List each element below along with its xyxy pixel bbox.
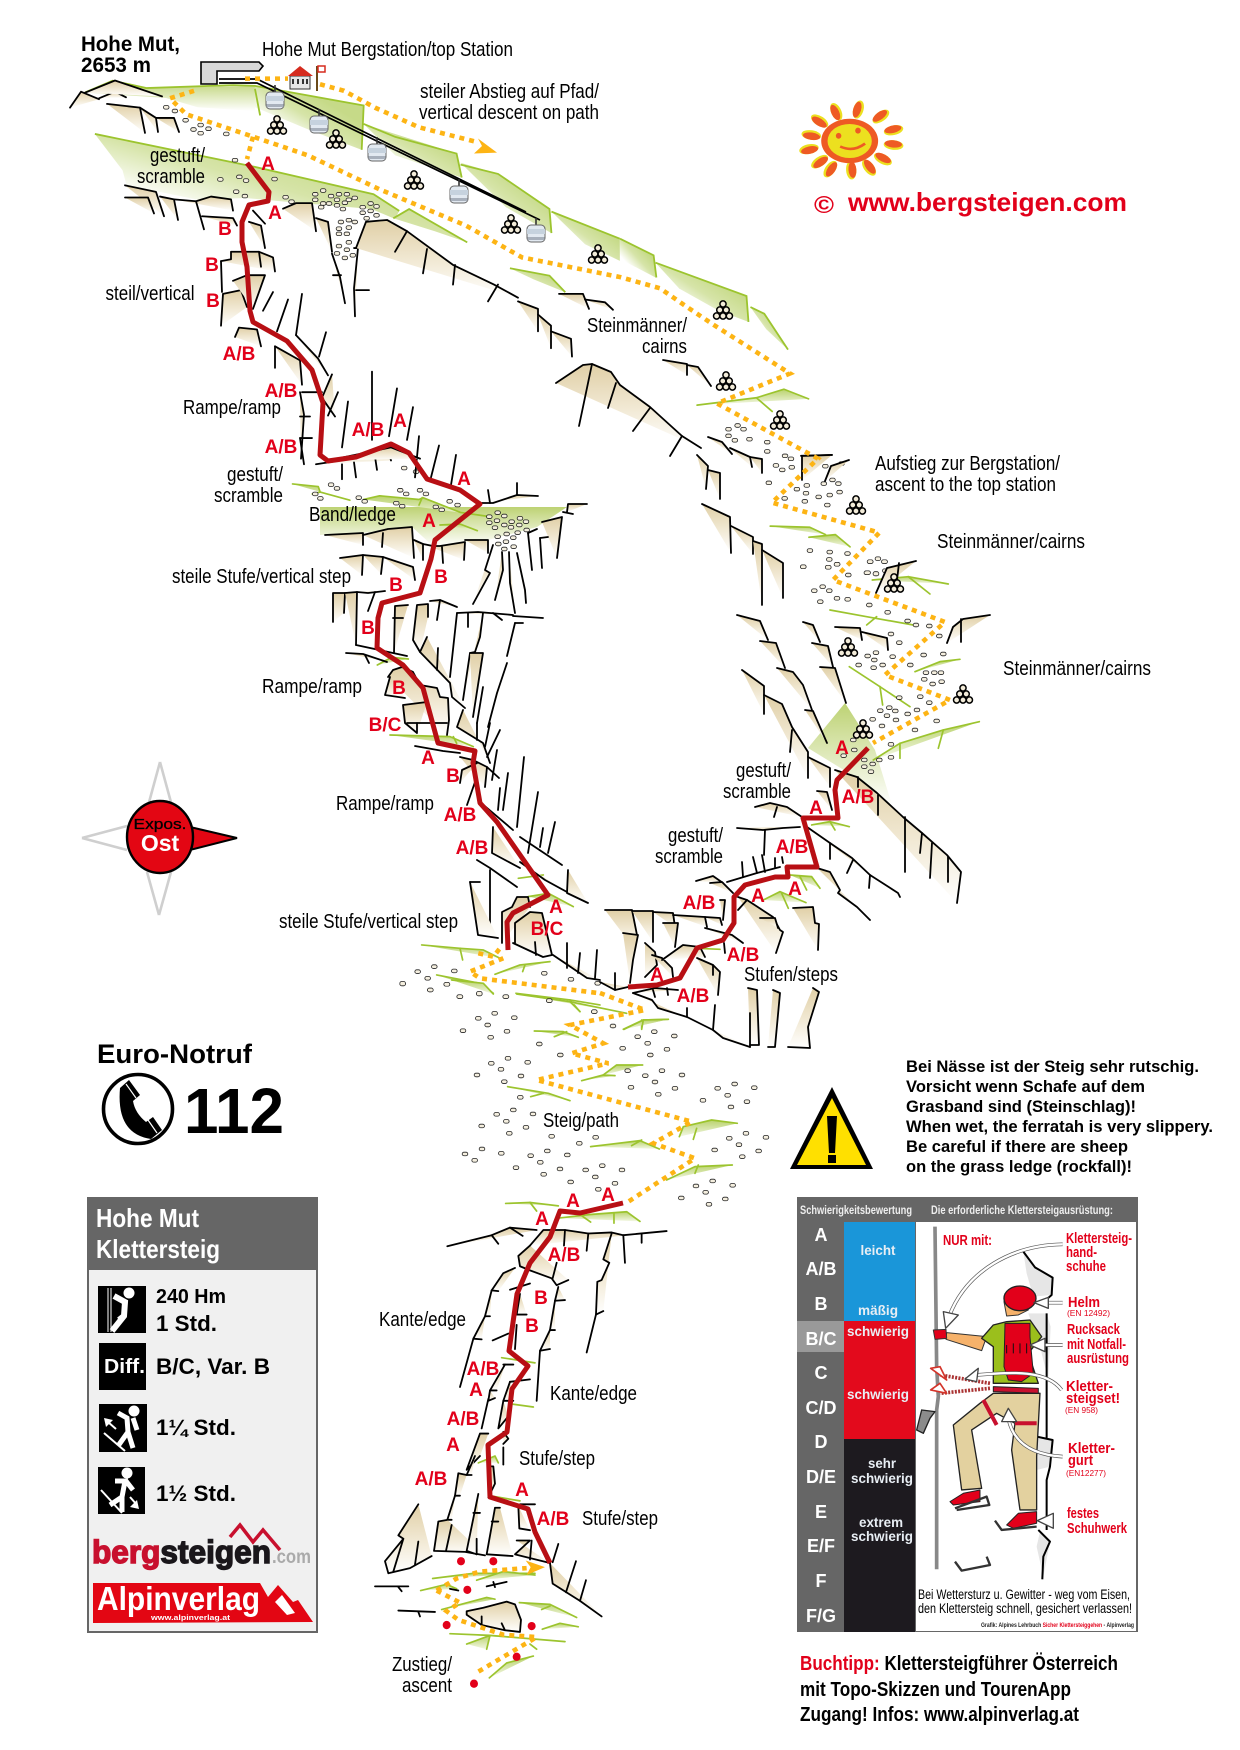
map labels: lower area: Stufe/step xyxy=(582,1507,658,1530)
difficulty grades along the route: A/B xyxy=(444,805,476,826)
icon: descent hiker xyxy=(98,1467,145,1514)
icon: warning triangle xyxy=(790,1087,873,1169)
difficulty grades along the route: A xyxy=(788,879,802,900)
difficulty scale: colour bands: schwierig xyxy=(847,1323,909,1339)
icon: smiling sun xyxy=(798,99,904,180)
equipment labels: Helm xyxy=(1068,1295,1100,1311)
difficulty scale: grades: E/F xyxy=(807,1536,835,1556)
difficulty grades along the route: A xyxy=(535,1209,549,1230)
equipment labels: (EN12277) xyxy=(1066,1469,1106,1478)
panel header xyxy=(87,1197,317,1270)
difficulty grades along the route: B xyxy=(392,678,406,699)
difficulty grades along the route: B xyxy=(525,1316,539,1337)
map labels: middle area: Stufen/steps xyxy=(744,963,838,986)
map labels: middle area: Steig/path xyxy=(543,1109,619,1132)
emergency number 112: 112 xyxy=(184,1075,284,1147)
stat: descent time: 1½ Std. xyxy=(156,1481,236,1506)
difficulty scale: grades: D/E xyxy=(806,1467,836,1487)
difficulty grades along the route: A xyxy=(393,411,407,432)
equipment labels: NUR mit: xyxy=(943,1233,992,1249)
wet-conditions warning text: on the grass ledge (rockfall)! xyxy=(906,1157,1132,1176)
icon: difficulty xyxy=(99,1343,146,1390)
difficulty grades along the route: A/B xyxy=(265,437,297,458)
difficulty grades along the route: B/C xyxy=(369,715,402,736)
icon: climber xyxy=(98,1286,146,1333)
map labels: lower area: Stufe/step xyxy=(519,1447,595,1470)
map labels: upper area: Steinmänner/ xyxy=(587,314,687,337)
equipment panel background xyxy=(916,1222,1136,1631)
map labels: upper area: scramble xyxy=(137,165,205,188)
compass: exposition east xyxy=(82,762,237,915)
cairns xyxy=(268,116,972,738)
panel header labels xyxy=(800,1203,1113,1217)
scree pebbles xyxy=(165,107,944,1204)
book recommendation xyxy=(800,1652,1118,1726)
map labels: upper area: steil/vertical xyxy=(106,282,194,305)
difficulty grades along the route: A xyxy=(261,154,275,175)
icon: telephone xyxy=(104,1074,172,1144)
difficulty grades along the route: A/B xyxy=(548,1245,580,1266)
compass: exposition east: Expos. xyxy=(134,816,186,833)
difficulty grades along the route: A xyxy=(457,469,471,490)
difficulty scale: grades: F/G xyxy=(806,1606,836,1626)
rock faces: upper section xyxy=(70,80,832,485)
map labels: lower area: ascent xyxy=(402,1674,452,1697)
green ledge: Band xyxy=(320,507,892,805)
summit name xyxy=(81,33,180,77)
book recommendation: Zugang! Infos: www.alpinverlag.at xyxy=(800,1704,1079,1726)
difficulty grades along the route: A/B xyxy=(265,381,297,402)
difficulty grades along the route: B/C xyxy=(531,919,564,940)
storm warning note: den Klettersteig schnell, gesichert verlassen! xyxy=(918,1601,1132,1616)
difficulty grades along the route: A/B xyxy=(223,344,255,365)
logo: bergsteigen.com xyxy=(92,1525,311,1570)
difficulty grades along the route: A xyxy=(268,203,282,224)
difficulty grades along the route: A/B xyxy=(842,787,874,808)
emergency number heading: Euro-Notruf xyxy=(97,1039,253,1069)
difficulty grades along the route: B xyxy=(205,255,219,276)
icon: difficulty: Diff. xyxy=(104,1356,145,1378)
equipment labels: (EN 12492) xyxy=(1067,1309,1110,1318)
map labels: lower area: Zustieg/ xyxy=(392,1653,452,1676)
difficulty grades along the route: A xyxy=(650,965,664,986)
difficulty grades along the route: A xyxy=(751,886,765,907)
map labels: upper area: ascent to the top station xyxy=(875,473,1056,496)
stat: approach time: 1¼ Std. xyxy=(156,1415,236,1440)
equipment labels: Kletter- xyxy=(1068,1441,1115,1457)
difficulty scale: grades: E xyxy=(815,1502,827,1522)
difficulty scale: grades xyxy=(806,1225,836,1626)
wet-conditions warning text: Grasband sind (Steinschlag)! xyxy=(906,1097,1136,1116)
summit name: Hohe Mut, xyxy=(81,33,180,56)
logo: bergsteigen.com: .com xyxy=(272,1547,311,1568)
panel header: Hohe Mut xyxy=(96,1203,199,1233)
climber illustration xyxy=(917,1227,1063,1579)
book recommendation: Buchtipp: Klettersteigführer Österreich xyxy=(800,1652,1118,1675)
map labels: middle area: scramble xyxy=(723,780,791,803)
difficulty grades along the route: B xyxy=(389,575,403,596)
wet-conditions warning text: Be careful if there are sheep xyxy=(906,1137,1128,1156)
difficulty scale: grades: C/D xyxy=(806,1398,836,1418)
map labels: upper area: Band/ledge xyxy=(309,503,396,526)
stat: height and duration xyxy=(156,1286,226,1336)
difficulty grades along the route: A/B xyxy=(352,420,384,441)
map labels: upper area: Aufstieg zur Bergstation/ xyxy=(875,452,1060,475)
map labels: lower area: Kante/edge xyxy=(379,1308,466,1331)
website copyright line: © xyxy=(814,192,834,219)
icon: ascent hiker xyxy=(99,1404,147,1452)
difficulty scale: grades: A xyxy=(814,1225,828,1245)
storm warning note xyxy=(918,1587,1132,1616)
map labels: upper area: cairns xyxy=(642,335,687,358)
map labels: middle area: gestuft/ xyxy=(736,759,791,782)
stat: difficulty: B/C, Var. B xyxy=(156,1354,270,1379)
difficulty grades along the route: B xyxy=(446,766,460,787)
difficulty grades along the route: A/B xyxy=(467,1359,499,1380)
difficulty grades along the route: B xyxy=(218,219,232,240)
difficulty grades along the route: A xyxy=(422,511,436,532)
difficulty grades along the route: A/B xyxy=(677,986,709,1007)
rock faces: central ridge and ledge xyxy=(325,360,916,980)
panel header labels: Die erforderliche Klettersteigausrüstung: xyxy=(931,1203,1113,1217)
map labels: lower area xyxy=(379,1308,658,1697)
wet-conditions warning text: When wet, the ferratah is very slippery. xyxy=(906,1117,1213,1136)
panel header labels: Schwierigkeitsbewertung xyxy=(800,1203,912,1217)
equipment labels: steigset! xyxy=(1066,1391,1120,1407)
map labels: upper area xyxy=(106,38,1151,680)
difficulty grades along the route: A/B xyxy=(537,1509,569,1530)
rock faces: lower section xyxy=(375,1228,667,1632)
map labels: upper area: steiler Abstieg auf Pfad/ xyxy=(420,80,599,103)
difficulty grades along the route: A/B xyxy=(456,838,488,859)
map labels: middle area: gestuft/ xyxy=(668,824,723,847)
red via ferrata route, lower part xyxy=(488,1203,623,1563)
map labels: upper area: Steinmänner/cairns xyxy=(937,530,1085,553)
logo: bergsteigen.com: bergsteigen xyxy=(92,1534,271,1570)
difficulty grades along the route: A xyxy=(421,748,435,769)
compass: exposition east: Ost xyxy=(141,830,180,856)
equipment labels: mit Notfall- xyxy=(1067,1337,1126,1353)
difficulty scale: grades: B xyxy=(814,1294,828,1314)
difficulty grades along the route: B xyxy=(434,567,448,588)
difficulty grades along the route: A/B xyxy=(447,1409,479,1430)
difficulty grades along the route: A xyxy=(549,897,563,918)
map labels: lower area: Kante/edge xyxy=(550,1382,637,1405)
difficulty scale: colour bands: leicht xyxy=(860,1242,896,1258)
equipment labels: hand- xyxy=(1066,1245,1097,1261)
difficulty grades along the route: B xyxy=(206,291,220,312)
difficulty scale: grades: A/B xyxy=(806,1259,836,1279)
red access-path dots xyxy=(443,1557,536,1688)
difficulty grades along the route: A xyxy=(515,1480,529,1501)
difficulty grades along the route: A/B xyxy=(776,837,808,858)
top station building xyxy=(201,62,263,84)
equipment labels: gurt xyxy=(1068,1453,1093,1469)
wet-conditions warning text: Vorsicht wenn Schafe auf dem xyxy=(906,1077,1145,1096)
map labels: upper area: vertical descent on path xyxy=(419,101,599,124)
map labels: upper area: Rampe/ramp xyxy=(183,396,281,419)
stat: height and duration: 240 Hm xyxy=(156,1286,226,1308)
red via ferrata route, middle part xyxy=(628,748,868,987)
panel: difficulty scale and equipment xyxy=(797,1197,1138,1632)
difficulty scale: colour bands: schwierig xyxy=(851,1470,913,1486)
equipment labels: (EN 958) xyxy=(1065,1406,1098,1415)
map labels: upper area: Hohe Mut Bergstation/top Station xyxy=(262,38,513,61)
difficulty scale: grades: D xyxy=(814,1432,828,1452)
map labels: middle area: steile Stufe/vertical step xyxy=(279,910,458,933)
graphic credit: Grafik: Alpines Lehrbuch Sicher Klettersteiggehen - Alpinverlag xyxy=(981,1623,1134,1629)
wet-conditions warning text xyxy=(906,1057,1213,1176)
map labels: upper area: steile Stufe/vertical step xyxy=(172,565,351,588)
difficulty scale: colour bands: schwierig xyxy=(847,1386,909,1402)
green alpine slopes, upper meadows xyxy=(85,81,788,350)
difficulty scale: grades: B/C xyxy=(806,1329,836,1349)
map labels: middle area xyxy=(262,675,838,1132)
equipment labels: ausrüstung xyxy=(1067,1351,1129,1367)
book recommendation: mit Topo-Skizzen und TourenApp xyxy=(800,1679,1071,1701)
difficulty grades along the route: A/B xyxy=(415,1469,447,1490)
equipment labels: schuhe xyxy=(1066,1259,1106,1275)
difficulty scale: colour bands: extrem xyxy=(859,1514,903,1530)
difficulty scale: colour bands: schwierig xyxy=(851,1528,913,1544)
difficulty grades along the route: B xyxy=(534,1288,548,1309)
wet-conditions warning text: Bei Nässe ist der Steig sehr rutschig. xyxy=(906,1057,1199,1076)
panel header: Klettersteig xyxy=(96,1234,220,1264)
difficulty grades along the route: A xyxy=(835,738,849,759)
aerial cableway with gondolas xyxy=(219,79,545,242)
grass tufts across the route xyxy=(293,389,979,1678)
difficulty grades along the route: A/B xyxy=(683,893,715,914)
difficulty scale: grades: C xyxy=(814,1363,828,1383)
difficulty scale: colour bands: sehr xyxy=(868,1455,897,1471)
difficulty scale: colour bands: mäßig xyxy=(858,1302,898,1318)
storm warning note: Bei Wettersturz u. Gewitter - weg vom Eisen, xyxy=(918,1587,1130,1602)
orange dashed descent and ascent paths xyxy=(170,79,950,1672)
red via ferrata route, upper part xyxy=(242,163,548,950)
difficulty scale: grades: F xyxy=(816,1571,826,1591)
difficulty grades along the route: A/B xyxy=(727,945,759,966)
difficulty scale: colour bands xyxy=(797,1222,915,1632)
mountain hut and flag xyxy=(288,66,325,91)
equipment labels: Klettersteig- xyxy=(1066,1231,1132,1247)
logo: Alpinverlag: Alpinverlag xyxy=(97,1580,260,1617)
equipment labels: festes xyxy=(1067,1506,1099,1522)
map labels: upper area: Steinmänner/cairns xyxy=(1003,657,1151,680)
rock faces: right wall and traverse xyxy=(600,615,990,1048)
difficulty grades along the route: A xyxy=(566,1191,580,1212)
map labels: upper area: scramble xyxy=(214,484,283,507)
equipment labels: Rucksack xyxy=(1067,1322,1121,1338)
difficulty grades along the route: A xyxy=(809,798,823,819)
difficulty grades along the route: A xyxy=(446,1435,460,1456)
difficulty grades along the route: A xyxy=(601,1185,615,1206)
map labels: middle area: Rampe/ramp xyxy=(336,792,434,815)
map labels: upper area: gestuft/ xyxy=(227,463,283,486)
equipment labels: Schuhwerk xyxy=(1067,1521,1128,1537)
difficulty grades along the route xyxy=(205,154,874,1530)
stat: height and duration: 1 Std. xyxy=(156,1311,217,1336)
logo: Alpinverlag: www.alpinverlag.at xyxy=(150,1613,231,1622)
map labels: middle area: scramble xyxy=(655,845,723,868)
summit name: 2653 m xyxy=(81,54,151,77)
website copyright line: www.bergsteigen.com xyxy=(847,187,1127,217)
map labels: middle area: Rampe/ramp xyxy=(262,675,362,698)
difficulty grades along the route: A xyxy=(469,1380,483,1401)
equipment labels xyxy=(943,1231,1132,1537)
panel: route summary xyxy=(87,1197,317,1632)
equipment labels: Kletter- xyxy=(1066,1379,1113,1395)
difficulty grades along the route: B xyxy=(361,618,375,639)
map labels: upper area: gestuft/ xyxy=(150,144,205,167)
